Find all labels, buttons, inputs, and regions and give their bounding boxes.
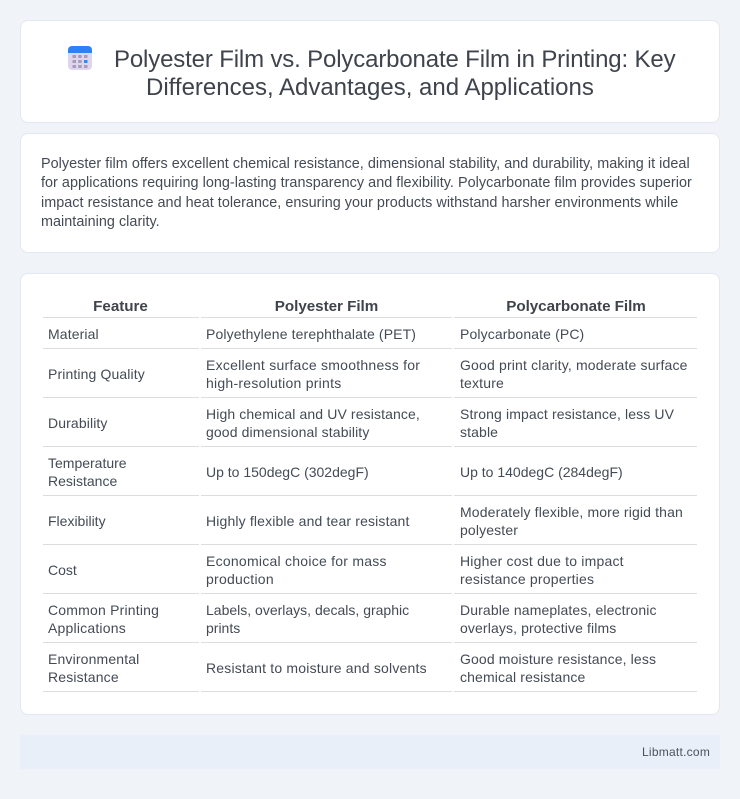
row: Environmental Resistance: Environmental — [48, 651, 139, 667]
row: Cost: Cost — [48, 562, 77, 578]
text: Polyethylene terephthalate (PET) — [206, 326, 416, 342]
text: chemical resistance — [460, 669, 585, 685]
intro text: maintaining clarity. — [41, 214, 160, 230]
panel: introduction — [20, 133, 720, 253]
text: Excellent surface smoothness for — [206, 357, 420, 373]
row: Environmental Resistance: Resistance — [48, 669, 119, 685]
text: Up to 140degC (284degF) — [460, 464, 623, 480]
text: Up to 150degC (302degF) — [206, 464, 369, 480]
text: stable — [460, 424, 498, 440]
row: Common Printing Applications: Common Printing — [48, 602, 159, 618]
row: Flexibility: Flexibility — [48, 513, 106, 529]
intro text: for applications requiring long-lasting transparency and flexibility. Polycarbonate film provides superior — [41, 175, 692, 191]
title line 2: Differences, Advantages, and Applications — [146, 74, 594, 101]
row: Temperature Resistance: Resistance — [48, 473, 117, 489]
text: Highly flexible and tear resistant — [206, 513, 410, 529]
row: Temperature Resistance: Temperature — [48, 455, 127, 471]
text: Good print clarity, moderate surface — [460, 357, 688, 373]
text: Good moisture resistance, less — [460, 651, 656, 667]
row: Printing Quality: Printing Quality — [48, 366, 145, 382]
text: Durable nameplates, electronic — [460, 602, 657, 618]
text: Higher cost due to impact — [460, 553, 624, 569]
table header: Polycarbonate Film: Polycarbonate Film — [506, 298, 646, 315]
footer bar — [20, 735, 720, 769]
table header: Feature: Feature — [93, 298, 148, 315]
text: Labels, overlays, decals, graphic — [206, 602, 409, 618]
intro text: Polyester film offers excellent chemical resistance, dimensional stability, and durability, making it ideal — [41, 156, 690, 172]
text: texture — [460, 375, 504, 391]
footer credit: Libmatt.com — [642, 745, 710, 759]
text: Economical choice for mass — [206, 553, 387, 569]
text: resistance properties — [460, 571, 594, 587]
text: High chemical and UV resistance, — [206, 406, 420, 422]
row: Environmental Resistance — [48, 651, 139, 685]
text: Strong impact resistance, less UV — [460, 406, 674, 422]
intro text — [41, 156, 692, 230]
row: Durability: Durability — [48, 415, 108, 431]
text: overlays, protective films — [460, 620, 616, 636]
intro text: impact resistance and heat tolerance, ensuring your products withstand harsher environments while — [41, 195, 678, 211]
text: prints — [206, 620, 240, 636]
panel: title card — [20, 20, 720, 123]
text: good dimensional stability — [206, 424, 369, 440]
text: Polycarbonate (PC) — [460, 326, 584, 342]
row: Material: Material — [48, 326, 99, 342]
row: Temperature Resistance — [48, 455, 127, 489]
icon: calendar — [68, 46, 92, 70]
text: polyester — [460, 522, 518, 538]
table header: Polyester Film: Polyester Film — [275, 298, 378, 315]
text: Moderately flexible, more rigid than — [460, 504, 683, 520]
row: Common Printing Applications: Applications — [48, 620, 126, 636]
row: Common Printing Applications — [48, 602, 159, 636]
text: high-resolution prints — [206, 375, 341, 391]
panel: comparison table — [20, 273, 720, 715]
title line 1: Polyester Film vs. Polycarbonate Film in Printing: Key — [114, 46, 675, 73]
text: production — [206, 571, 274, 587]
text: Resistant to moisture and solvents — [206, 660, 427, 676]
